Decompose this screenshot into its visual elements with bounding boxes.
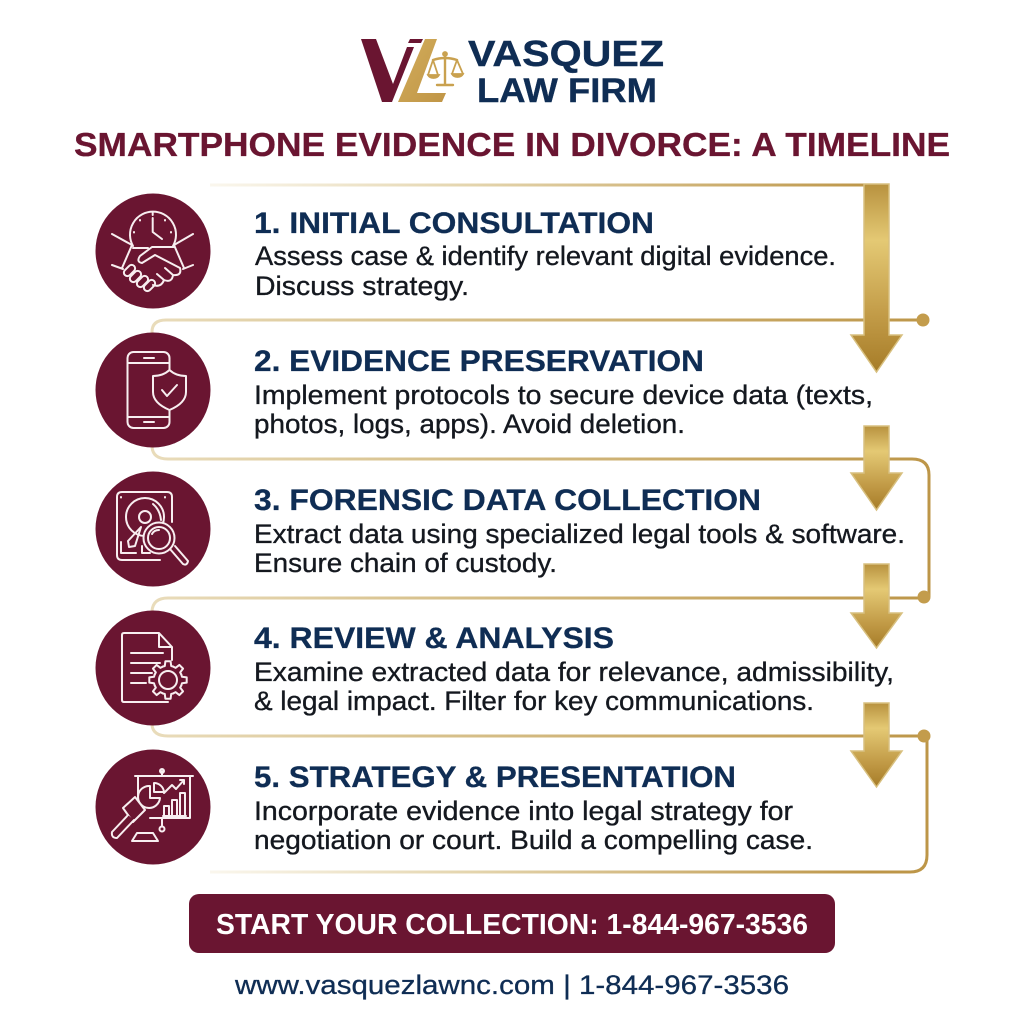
step 1 text: Discuss strategy. [255,271,469,301]
step 2 text [254,345,873,439]
arrow 1 [851,184,902,372]
step 5 text: Incorporate evidence into legal strategy for [254,796,793,826]
step 3 text: 3. FORENSIC DATA COLLECTION [254,484,761,517]
icon: gavel and presentation board [96,750,210,864]
call to action banner: START YOUR COLLECTION: 1-844-967-3536 [216,909,808,941]
timeline connector lines [152,185,930,872]
icon: phone with shield [96,332,210,448]
step 1 text: 1. INITIAL CONSULTATION [254,207,654,240]
logo wordmark [468,33,664,110]
icon: document and gear [96,610,210,726]
step 1 text: Assess case & identify relevant digital evidence. [255,241,836,271]
step 5 text: 5. STRATEGY & PRESENTATION [254,761,736,794]
step 4 text [254,622,894,716]
step 1 text [254,207,836,301]
logo: Vasquez Law Firm [361,33,664,110]
step 4 text: Examine extracted data for relevance, admissibility, [254,657,894,687]
call to action banner [189,894,835,953]
logo wordmark: LAW FIRM [477,72,657,110]
logo wordmark: VASQUEZ [468,33,664,74]
step 3 text: Ensure chain of custody. [254,548,557,578]
arrow 4 [851,703,902,787]
logo monogram VL [361,39,446,102]
title: SMARTPHONE EVIDENCE IN DIVORCE: A TIMELINE [74,126,950,163]
step 2 text: Implement protocols to secure device data (texts, [254,380,873,410]
icon: hard drive and magnifier [96,472,210,586]
arrow 2 [851,426,902,510]
step 4 text: 4. REVIEW & ANALYSIS [254,622,614,655]
step 5 text [254,761,813,855]
step 5 text: negotiation or court. Build a compelling case. [254,825,813,855]
step 4 text: & legal impact. Filter for key communications. [254,686,814,716]
logo icon: scales of justice [428,52,463,85]
step 3 text [254,484,905,578]
arrow 3 [851,564,902,648]
icon: clock and handshake [96,194,210,308]
footer contact line: www.vasquezlawnc.com | 1-844-967-3536 [234,970,789,1000]
step 3 text: Extract data using specialized legal tools & software. [254,519,905,549]
step 2 text: photos, logs, apps). Avoid deletion. [254,409,685,439]
step 2 text: 2. EVIDENCE PRESERVATION [254,345,704,378]
